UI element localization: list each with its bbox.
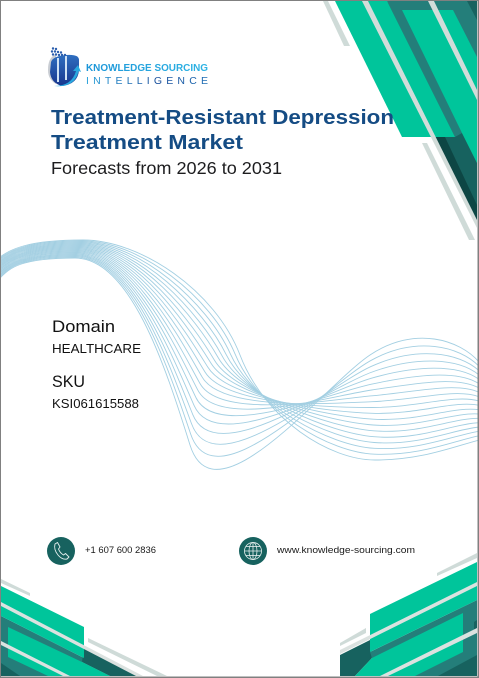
icon: phone xyxy=(47,537,75,565)
logo text line 1: KNOWLEDGE SOURCING xyxy=(86,62,208,74)
icon: globe xyxy=(239,537,267,565)
decoration: bottom-left angled bands xyxy=(1,579,167,676)
SKU block xyxy=(52,372,139,411)
domain block xyxy=(52,317,141,356)
contact: phone xyxy=(47,537,156,565)
domain value: HEALTHCARE xyxy=(52,341,141,356)
decoration: bottom-right angled bands xyxy=(340,553,477,676)
SKU value: KSI061615588 xyxy=(52,396,139,411)
logo icon xyxy=(48,47,81,86)
title xyxy=(51,107,394,178)
domain label: Domain xyxy=(52,317,115,336)
SKU label: SKU xyxy=(52,372,85,391)
contact: website xyxy=(239,537,415,565)
decoration: top-right angled bands xyxy=(323,1,477,240)
title line 1: Treatment-Resistant Depression xyxy=(51,107,394,129)
logo text line 2: INTELLIGENCE xyxy=(86,75,208,87)
website address: www.knowledge-sourcing.com xyxy=(276,545,415,556)
logo: Knowledge Sourcing Intelligence xyxy=(48,47,208,87)
decorative wave line bundle xyxy=(0,240,479,469)
subtitle: Forecasts from 2026 to 2031 xyxy=(51,158,282,178)
title line 2: Treatment Market xyxy=(51,132,243,154)
phone number: +1 607 600 2836 xyxy=(85,545,156,556)
